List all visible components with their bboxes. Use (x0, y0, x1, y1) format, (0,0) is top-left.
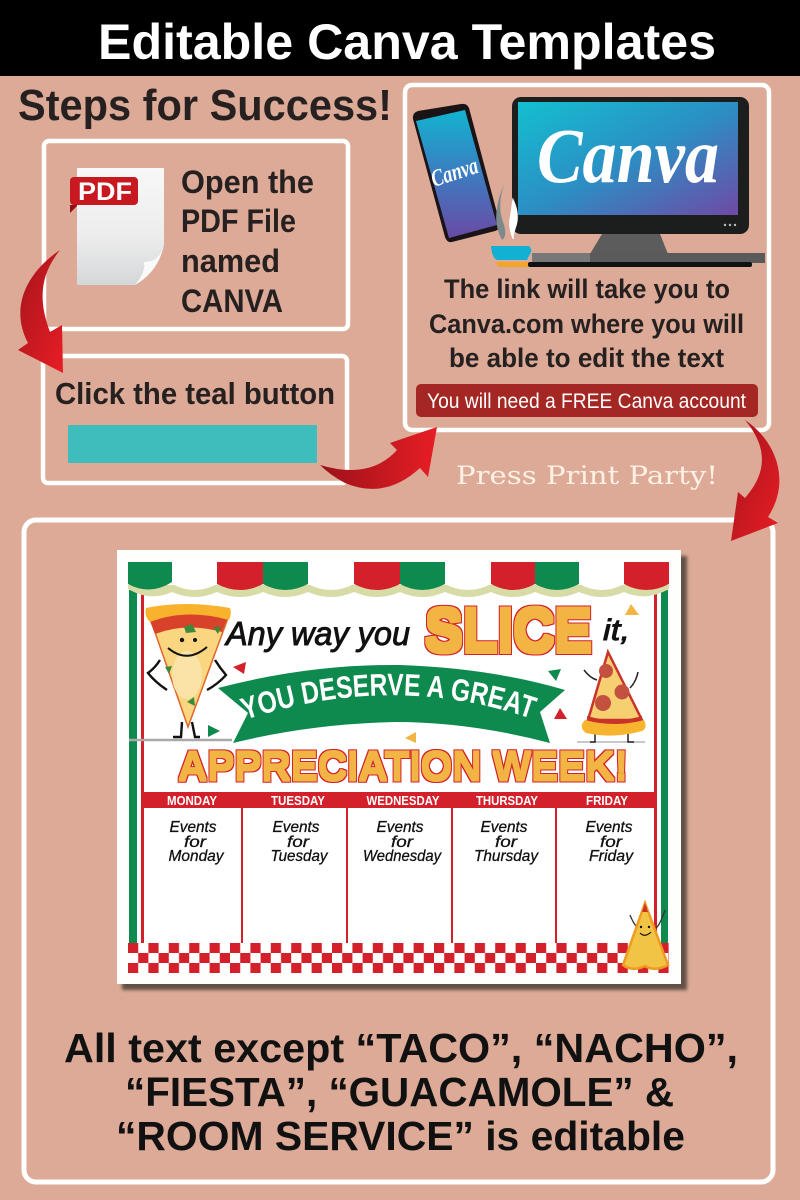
text: editable note (64, 1025, 738, 1159)
text: link explanation: be able to edit the text (449, 343, 724, 373)
text: link explanation: The link will take you to (444, 274, 730, 304)
heading: steps for success: Steps for Success! (18, 81, 392, 130)
event text: Friday (586, 819, 634, 865)
text: open the pdf instructions: CANVA (181, 283, 283, 319)
text: link explanation (429, 274, 744, 373)
character: pepperoni pizza slice (577, 652, 646, 742)
day headings (167, 793, 628, 808)
callout: free Canva account: You will need a FREE Canva account (427, 390, 746, 413)
event text: Wednesday: Events (376, 819, 424, 836)
icon: coffee cup (491, 185, 531, 267)
event text: Friday: for (600, 834, 623, 851)
text: open the pdf instructions: named (181, 243, 280, 279)
event text: Thursday: Events (480, 819, 528, 836)
event text: Wednesday (363, 819, 442, 865)
icon: PDF document (70, 168, 164, 285)
event text: Thursday (474, 819, 539, 865)
event text: Friday: Friday (589, 848, 634, 865)
header banner (0, 0, 800, 76)
event text: Tuesday: Events (272, 819, 320, 836)
text: link explanation: Canva.com where you will (429, 309, 744, 339)
text: appreciation week: APPRECIATION WEEK! (178, 743, 628, 789)
text: editable note: “FIESTA”, “GUACAMOLE” & (125, 1069, 674, 1115)
event text: Monday: Monday (168, 848, 224, 865)
text: open the pdf instructions: Open the (181, 164, 314, 200)
checkered border (128, 943, 669, 973)
arrow: Canva to poster (731, 420, 779, 541)
icon: desktop monitor: Canva (537, 112, 719, 199)
day headings: THURSDAY (476, 793, 538, 808)
icon: PDF document: PDF (78, 178, 132, 206)
text: open the pdf instructions (181, 164, 314, 319)
day headings: WEDNESDAY (366, 793, 440, 808)
text: editable note: All text except “TACO”, “NACHO”, (64, 1025, 738, 1071)
icon: smartphone: Canva (428, 153, 482, 193)
text: it: it, (603, 614, 630, 647)
event text: Monday: for (184, 834, 207, 851)
event text: Thursday: for (495, 834, 518, 851)
event text: Tuesday (270, 819, 328, 865)
event text: Monday: Events (170, 819, 216, 836)
text: any way you: Any way you (224, 615, 410, 652)
panel: poster preview (22, 518, 776, 1184)
text: Press Print Party: Press Print Party! (456, 461, 718, 490)
poster shadow (122, 556, 687, 990)
confetti triangles (208, 604, 639, 743)
teal button (68, 425, 317, 463)
day headings: MONDAY (167, 793, 217, 808)
event text: Wednesday: for (391, 834, 414, 851)
text: editable note: “ROOM SERVICE” is editable (116, 1113, 685, 1159)
panel: Canva link (405, 85, 769, 430)
arrow: PDF to teal button (18, 250, 63, 373)
header banner: Editable Canva Templates (98, 14, 716, 70)
text: SLICE: SLICE (425, 597, 592, 664)
icon: smartphone (413, 104, 500, 242)
panel: click the teal button (43, 356, 347, 483)
character: smiling pizza slice (129, 604, 232, 740)
event text: Monday (168, 819, 224, 865)
event text: Wednesday: Wednesday (363, 848, 442, 865)
side stripes (129, 590, 668, 943)
weekly table (141, 792, 657, 943)
event text: Friday: Events (586, 819, 632, 836)
banner: you deserve a great (218, 665, 565, 743)
icon: desktop monitor (512, 97, 765, 267)
poster (117, 550, 681, 984)
callout: free Canva account (416, 384, 758, 417)
event text: Thursday: Thursday (474, 848, 539, 865)
panel: open the PDF (44, 141, 348, 329)
text: open the pdf instructions: PDF File (181, 203, 296, 239)
character: nacho (623, 903, 668, 969)
banner: you deserve a great: YOU DESERVE A GREAT (239, 674, 538, 718)
arrow: teal button to Canva (320, 427, 437, 489)
awning (128, 562, 669, 597)
day headings: TUESDAY (271, 793, 325, 808)
panel: click the teal button: Click the teal button (55, 376, 335, 411)
day headings: FRIDAY (586, 793, 628, 808)
event text: Tuesday: Tuesday (270, 848, 328, 865)
event text: Tuesday: for (287, 834, 310, 851)
